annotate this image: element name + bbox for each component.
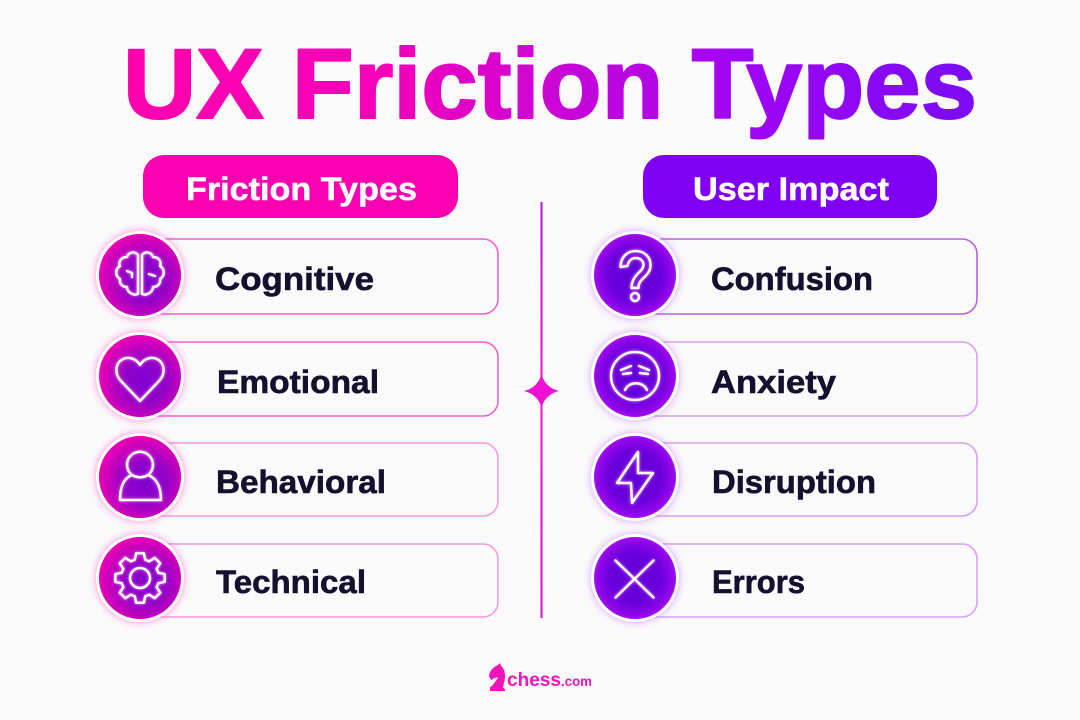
row: cognitive [96,231,498,319]
icon: heart [116,358,164,401]
row: behavioral: Behavioral [216,464,386,500]
row: anxiety [591,332,977,420]
row: confusion: Confusion [711,261,873,297]
icon: star [524,374,559,408]
row: errors: Errors [712,564,805,600]
panel: user impact [591,155,977,622]
row: technical [96,534,498,622]
row: cognitive: Cognitive [215,261,374,297]
heading: friction types [143,155,458,218]
divider with star [524,202,559,618]
heading: user impact: User Impact [693,171,889,207]
heading: user impact [643,155,937,218]
footer logo [489,663,592,691]
row: anxiety: Anxiety [711,364,836,400]
icon: brain [116,253,164,295]
icon: chess knight [489,663,505,691]
icon: gear [115,553,165,603]
footer logo: .com [561,674,592,689]
icon: person [120,452,161,500]
row: confusion [591,231,977,319]
footer logo: chess [507,669,561,691]
icon: x mark [616,560,654,598]
icon: sad face [611,352,659,400]
row: disruption [591,433,977,521]
row: technical: Technical [216,564,366,600]
row: emotional [96,332,498,420]
title: UX Friction Types [123,28,977,139]
icon: question mark [620,251,650,301]
panel: friction types [96,155,498,622]
heading: friction types: Friction Types [186,171,417,207]
row: disruption: Disruption [712,464,876,500]
row: emotional: Emotional [217,364,379,400]
row: behavioral [96,433,498,521]
icon: lightning bolt [617,452,653,503]
row: errors [591,534,977,622]
